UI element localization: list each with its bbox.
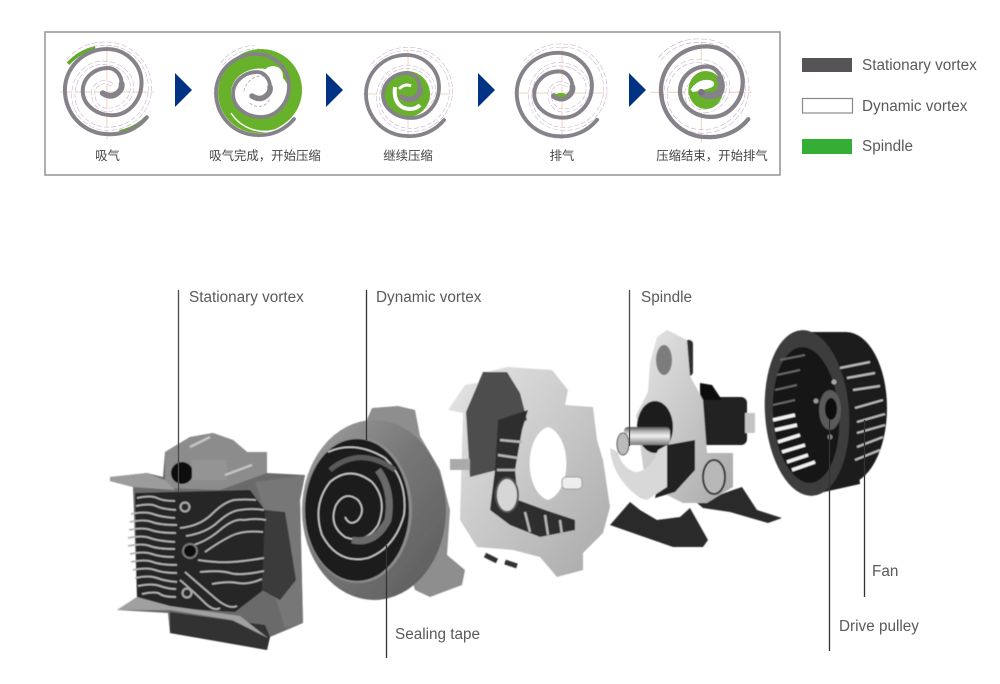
spiral 5: compression ends, exhaust starts	[651, 41, 752, 143]
legend swatch: stationary vortex	[802, 58, 852, 72]
legend label: dynamic vortex: Dynamic vortex	[862, 98, 968, 115]
front foot	[610, 502, 708, 547]
slots	[773, 415, 815, 470]
panel: compression cycle	[45, 32, 780, 175]
bearing	[637, 401, 673, 453]
legend label: spindle: Spindle	[862, 138, 913, 155]
label: exhaust: 排气	[550, 148, 574, 163]
label: intake: 吸气	[95, 148, 120, 163]
arrow 1	[175, 73, 192, 107]
callout: sealing tape: Sealing tape	[395, 626, 480, 643]
spiral wrap	[318, 447, 405, 559]
label: continued compression: 继续压缩	[383, 148, 433, 163]
drum blades	[840, 362, 885, 460]
legend	[802, 57, 977, 155]
arrow 2	[326, 73, 343, 107]
label: intake complete, compression starts: 吸气完成，开始压缩	[209, 148, 321, 163]
inlet port	[171, 462, 193, 484]
mounting plate	[636, 330, 733, 503]
front rim	[759, 327, 855, 499]
arrow 4	[629, 73, 646, 107]
counterweight	[610, 445, 667, 500]
spiral 4: exhaust	[516, 46, 608, 139]
component: housing	[448, 367, 610, 577]
spiral 3: continued compression	[363, 49, 453, 139]
hub	[819, 390, 841, 430]
cooling fins	[128, 496, 266, 609]
legend label: stationary vortex: Stationary vortex	[862, 57, 977, 74]
callout: fan: Fan	[872, 563, 898, 580]
rear foot	[697, 487, 782, 523]
component: stationary vortex block	[110, 433, 305, 650]
component: dynamic vortex disc	[302, 406, 465, 600]
shaft	[624, 427, 670, 445]
component: spindle	[610, 330, 782, 547]
callout: dynamic vortex: Dynamic vortex	[376, 289, 482, 306]
spiral 2: intake complete	[213, 47, 303, 138]
rear cylinder	[695, 397, 747, 445]
callout: stationary vortex: Stationary vortex	[189, 289, 304, 306]
label: compression ends, exhaust starts: 压缩结束，开始排气	[656, 148, 768, 163]
callout: sealing tape	[386, 545, 480, 658]
arrow 3	[478, 73, 495, 107]
legend swatch: dynamic vortex	[802, 98, 852, 113]
callout: spindle: Spindle	[641, 289, 692, 306]
component: fan	[759, 327, 887, 499]
callout: drive pulley: Drive pulley	[839, 618, 919, 635]
legend swatch: spindle	[802, 139, 852, 154]
spiral 1: intake	[60, 44, 154, 139]
